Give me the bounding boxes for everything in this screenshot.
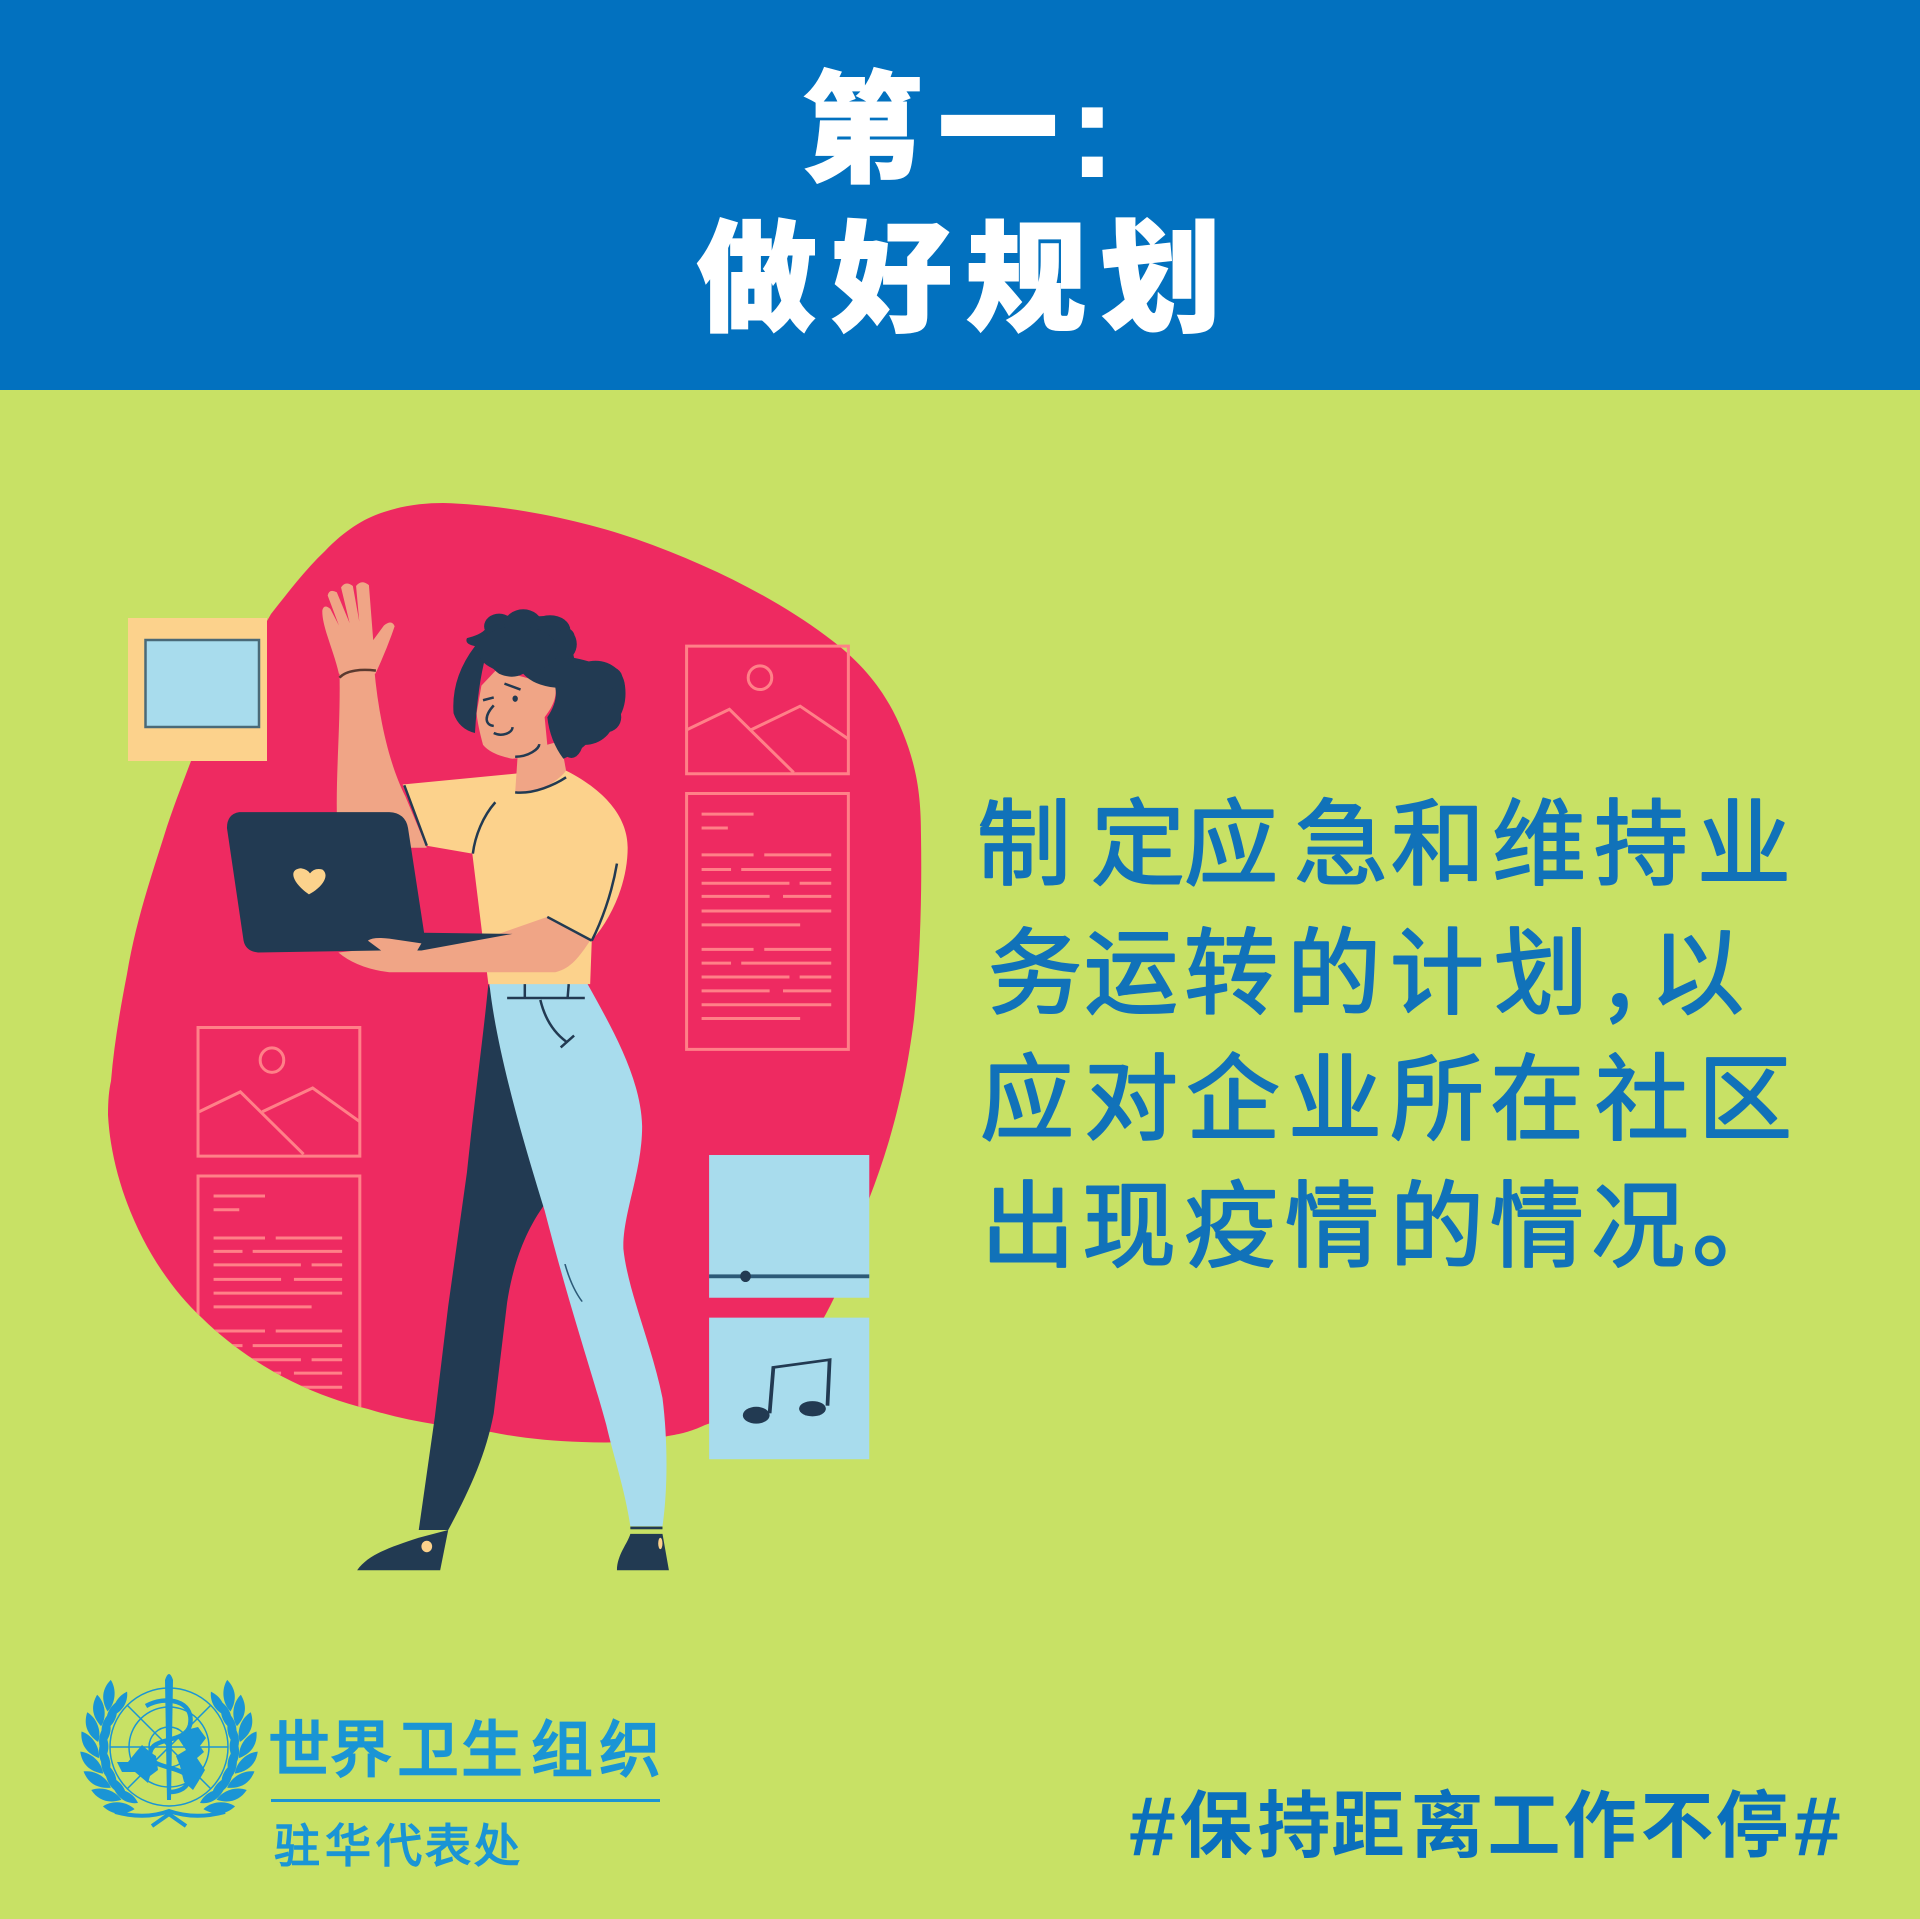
logo: WHO emblem xyxy=(79,1674,259,1826)
hashtag left mark: # xyxy=(1129,1779,1176,1873)
hashtag right mark: # xyxy=(1794,1779,1841,1873)
figure: t-shirt xyxy=(403,771,628,1047)
emblem ribbon xyxy=(115,1811,225,1826)
title line 1: 第一 xyxy=(802,33,1058,207)
pink blob background xyxy=(108,503,921,1442)
title line 2: 做好规划 xyxy=(697,182,1221,356)
emblem staff and snake xyxy=(146,1674,191,1800)
logo divider xyxy=(271,1799,660,1802)
lower left image and document frames xyxy=(198,1028,360,1444)
emblem laurel wreath xyxy=(79,1679,259,1821)
body line 2: 务运转的计划,以 xyxy=(988,898,1744,1034)
icon: tablet card xyxy=(128,618,267,761)
icon: laptop with heart xyxy=(227,812,512,953)
body line 1: 制定应急和维持业 xyxy=(977,769,1791,905)
figure: raised arm and hand xyxy=(322,582,427,848)
logo: organisation name: 世界卫生组织 xyxy=(268,1700,661,1789)
figure: legs xyxy=(357,984,669,1570)
hashtag xyxy=(1129,1767,1841,1873)
emblem globe grid xyxy=(110,1688,228,1806)
illustration: woman with laptop xyxy=(108,503,921,1570)
figure: forearm xyxy=(338,917,592,972)
header band xyxy=(0,0,1920,390)
icon: video player card xyxy=(709,1155,869,1298)
logo: office name: 驻华代表处 xyxy=(274,1810,520,1876)
icon: music note card xyxy=(709,1318,869,1459)
upper right image and document frames xyxy=(687,646,848,1049)
body line 3: 应对企业所在社区 xyxy=(980,1024,1792,1160)
emblem continents xyxy=(117,1727,206,1790)
body line 4: 出现疫情的情况。 xyxy=(981,1151,1786,1287)
title line 1: : xyxy=(1070,56,1115,205)
body text xyxy=(977,769,1792,1287)
figure: head and hair xyxy=(453,609,626,793)
hashtag text: 保持距离工作不停 xyxy=(1180,1767,1788,1873)
